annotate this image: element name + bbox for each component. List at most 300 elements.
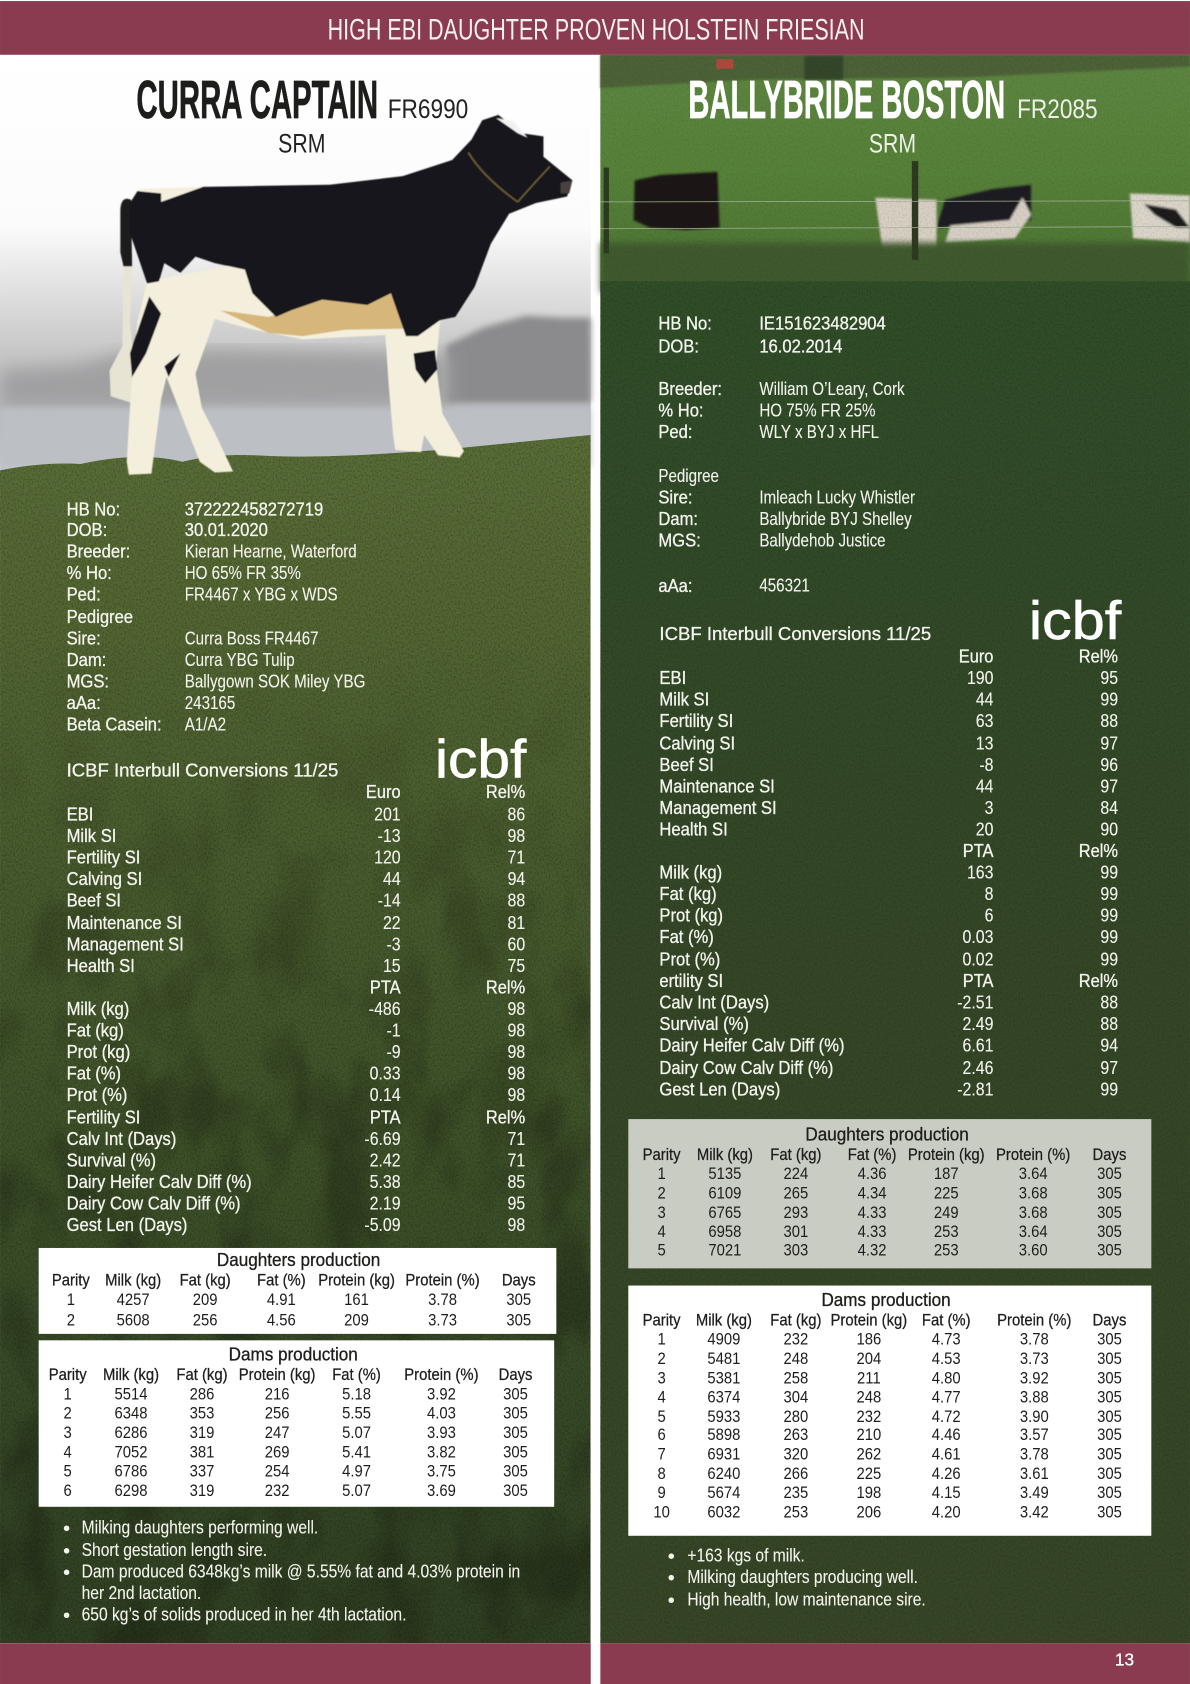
table: Ballybride Boston daughters production: 253 (934, 1223, 959, 1241)
table: Ballybride Boston genetic evaluation: Milk (kg) (659, 862, 722, 883)
panel: Curra Captain (0, 55, 591, 1643)
table: Curra Captain genetic evaluation: Calv Int (Days) (67, 1128, 176, 1149)
table: Ballybride Boston dams production: 3.78 (1020, 1446, 1049, 1464)
table: Ballybride Boston genetic evaluation: 6.61 (963, 1035, 993, 1056)
footer band right with page number (600, 1643, 1190, 1684)
table: Curra Captain dams production: 5.18 (342, 1386, 371, 1404)
table: Ballybride Boston dams production: Milk (kg) (696, 1311, 752, 1330)
table: Ballybride Boston daughters production: Daughters production (805, 1124, 969, 1145)
table: Ballybride Boston daughters production: 3.64 (1019, 1223, 1048, 1241)
table: Ballybride Boston daughters production: 4.33 (858, 1223, 887, 1241)
table: Ballybride Boston genetic evaluation: 88 (1100, 1014, 1118, 1034)
table: Ballybride Boston genetic evaluation: 99 (1100, 1079, 1118, 1100)
table: Curra Captain genetic evaluation: Gest Len (Days) (67, 1214, 187, 1235)
text block: bull details (658, 313, 915, 596)
table: Curra Captain genetic evaluation: Beef SI (67, 890, 121, 911)
table: Curra Captain genetic evaluation: 81 (508, 913, 525, 933)
table: Ballybride Boston daughters production (628, 1119, 1151, 1268)
table: Curra Captain dams production: 337 (190, 1463, 214, 1481)
table: Ballybride Boston genetic evaluation: 88 (1100, 711, 1118, 731)
table: Ballybride Boston daughters production: 265 (783, 1185, 808, 1203)
table: Ballybride Boston genetic evaluation: Beef SI (659, 754, 714, 775)
table: Ballybride Boston dams production: 3.61 (1020, 1465, 1049, 1483)
table: Curra Captain dams production: 305 (503, 1405, 528, 1423)
table: Ballybride Boston genetic evaluation: -2.81 (957, 1079, 993, 1100)
table: Curra Captain dams production: 7052 (114, 1444, 148, 1462)
table: Curra Captain daughters production: 256 (193, 1311, 218, 1330)
table: Curra Captain genetic evaluation: 95 (508, 1193, 525, 1214)
table: Ballybride Boston dams production: 4.20 (932, 1504, 961, 1522)
table: Ballybride Boston dams production: Dams production (821, 1289, 951, 1310)
table: Ballybride Boston dams production: 4909 (707, 1331, 741, 1349)
table: Curra Captain daughters production: Daughters production (217, 1249, 380, 1270)
text block: bull details: HO 65% FR 35% (185, 563, 301, 583)
text block: Ballybride Boston highlights: High health, low maintenance sire. (687, 1589, 926, 1610)
text block: bull details: FR4467 x YBG x WDS (185, 584, 338, 605)
table: Ballybride Boston dams production: 305 (1097, 1331, 1122, 1349)
table: Curra Captain genetic evaluation: -486 (369, 999, 401, 1019)
table: Ballybride Boston daughters production: 7021 (708, 1242, 742, 1260)
text block: bull details: Dam: (67, 649, 106, 670)
table: Curra Captain genetic evaluation: 2.42 (370, 1150, 401, 1171)
text block: bull details: IE151623482904 (759, 313, 886, 334)
table: Curra Captain dams production: 305 (503, 1444, 528, 1462)
photo background: dark grass (600, 281, 1190, 1643)
table: Curra Captain dams production: 305 (503, 1482, 528, 1500)
table: Ballybride Boston dams production: 4.61 (932, 1446, 961, 1464)
text block: bull details: 16.02.2014 (759, 336, 843, 356)
table: Ballybride Boston daughters production: 225 (934, 1185, 959, 1203)
table: Ballybride Boston genetic evaluation (659, 646, 1119, 1100)
table: Curra Captain dams production: 254 (265, 1463, 290, 1481)
table: Ballybride Boston dams production: 7 (657, 1446, 666, 1464)
text block: bull details: Curra Boss FR4467 (185, 628, 319, 649)
table: Ballybride Boston daughters production: 305 (1097, 1242, 1122, 1260)
table: Ballybride Boston genetic evaluation: Maintenance SI (659, 776, 775, 797)
table: Ballybride Boston genetic evaluation: Fat (kg) (659, 883, 717, 904)
table: Curra Captain genetic evaluation: 2.19 (370, 1193, 401, 1214)
table: Curra Captain daughters production: 161 (344, 1291, 369, 1309)
text block: Curra Captain highlights: Dam produced 6348kg’s milk @ 5.55% fat and 4.03% protein in (82, 1562, 520, 1582)
table: Curra Captain dams production: Parity (49, 1366, 87, 1384)
text block: bull details: DOB: (658, 336, 699, 356)
table: Curra Captain genetic evaluation: -6.69 (364, 1129, 401, 1149)
table: Curra Captain genetic evaluation: Management SI (67, 934, 184, 955)
table: Curra Captain genetic evaluation: Milk SI (67, 825, 116, 846)
table: Curra Captain dams production: 5.07 (342, 1424, 371, 1442)
table: Ballybride Boston dams production: 5 (657, 1408, 666, 1426)
table: Curra Captain genetic evaluation: Dairy Cow Calv Diff (%) (67, 1193, 241, 1213)
table: Ballybride Boston genetic evaluation: 94 (1100, 1035, 1119, 1056)
table: Ballybride Boston genetic evaluation: Dairy Heifer Calv Diff (%) (659, 1035, 845, 1056)
table: Ballybride Boston daughters production: Fat (kg) (770, 1146, 821, 1164)
table: Ballybride Boston genetic evaluation: -8 (979, 755, 993, 775)
table: Ballybride Boston dams production: 305 (1097, 1465, 1122, 1483)
table: Curra Captain genetic evaluation: Prot (%) (67, 1084, 127, 1105)
table: Ballybride Boston genetic evaluation: Euro (959, 646, 993, 667)
table: Ballybride Boston genetic evaluation: Rel% (1079, 970, 1118, 991)
table: Curra Captain genetic evaluation: 5.38 (370, 1172, 401, 1192)
table: Curra Captain dams production: 6786 (114, 1463, 148, 1481)
table: Ballybride Boston genetic evaluation: -2.51 (957, 992, 993, 1013)
photo background: grass hillside (0, 430, 591, 1643)
table: Curra Captain dams production: 6 (64, 1482, 72, 1500)
table: Curra Captain dams production: 2 (64, 1405, 72, 1423)
table: Curra Captain daughters production: 4.56 (267, 1311, 296, 1330)
table: Ballybride Boston dams production: 266 (783, 1465, 808, 1483)
table: Ballybride Boston genetic evaluation: EBI (659, 667, 686, 688)
text block: bull details: DOB: (67, 519, 107, 540)
icon: icbf logo: icbf (1029, 591, 1121, 651)
table: Ballybride Boston dams production: 186 (857, 1331, 881, 1349)
table: Ballybride Boston daughters production: Fat (%) (848, 1146, 896, 1164)
table: Curra Captain genetic evaluation: Calving SI (67, 868, 142, 889)
table: Curra Captain dams production: 3 (64, 1424, 72, 1442)
photo background: field with fence and cows (600, 55, 1190, 292)
table: Curra Captain dams production: Protein (%) (404, 1366, 479, 1384)
table: Ballybride Boston dams production: 6240 (707, 1465, 741, 1483)
code: FR2085: FR2085 (1017, 94, 1098, 124)
table: Ballybride Boston dams production: 305 (1097, 1369, 1122, 1388)
table: Ballybride Boston dams production: 204 (857, 1350, 881, 1368)
table: Ballybride Boston genetic evaluation: 99 (1100, 690, 1118, 710)
table: Ballybride Boston dams production: 235 (783, 1484, 808, 1502)
table: Curra Captain genetic evaluation: 22 (383, 913, 401, 933)
table: Ballybride Boston genetic evaluation: Gest Len (Days) (659, 1079, 780, 1100)
table: Curra Captain genetic evaluation: -1 (386, 1020, 401, 1041)
table: Curra Captain genetic evaluation: -5.09 (364, 1215, 401, 1235)
photo background: misty sky and hills (0, 55, 591, 484)
table: Ballybride Boston daughters production: 4.32 (858, 1242, 887, 1260)
table: Curra Captain daughters production: 209 (344, 1311, 369, 1330)
text block: bull details: Ped: (658, 421, 693, 442)
table: Ballybride Boston genetic evaluation: ertility SI (659, 970, 723, 991)
text block: Curra Captain highlights: Milking daughters performing well. (82, 1518, 318, 1538)
table: Ballybride Boston dams production: 3.88 (1020, 1389, 1049, 1407)
table: Curra Captain genetic evaluation: Milk (kg) (67, 998, 129, 1019)
table: Curra Captain genetic evaluation: 86 (508, 805, 525, 825)
table: Ballybride Boston daughters production: 2 (657, 1185, 666, 1203)
table: Curra Captain genetic evaluation: -3 (386, 934, 401, 955)
table: Ballybride Boston dams production: 4.73 (932, 1331, 961, 1349)
table: Ballybride Boston dams production: 253 (783, 1504, 808, 1522)
table: Ballybride Boston genetic evaluation: Prot (kg) (659, 905, 723, 926)
table: Ballybride Boston dams production: 5381 (707, 1369, 741, 1388)
table: Ballybride Boston dams production: 5481 (707, 1350, 741, 1368)
text block: bull details: Ped: (67, 584, 101, 605)
table: Ballybride Boston daughters production: 187 (934, 1165, 959, 1183)
table: Ballybride Boston dams production: 305 (1097, 1426, 1122, 1444)
table: Ballybride Boston daughters production: 253 (934, 1242, 959, 1260)
table: Ballybride Boston genetic evaluation: Rel% (1079, 840, 1118, 861)
table: Ballybride Boston genetic evaluation: 3 (985, 798, 993, 818)
table: Curra Captain genetic evaluation: Fat (%) (67, 1063, 121, 1084)
table: Curra Captain dams production: 305 (503, 1424, 528, 1442)
table: Ballybride Boston dams production: 3.78 (1020, 1331, 1049, 1349)
table: Curra Captain genetic evaluation: 98 (508, 826, 525, 846)
table: Ballybride Boston dams production: 6032 (707, 1504, 741, 1522)
text block: bull details: MGS: (67, 671, 109, 692)
table: Ballybride Boston dams production: 4.53 (932, 1350, 961, 1368)
table: Ballybride Boston dams production: 305 (1097, 1504, 1122, 1522)
table: Curra Captain genetic evaluation: -14 (378, 890, 401, 911)
table: Ballybride Boston genetic evaluation: 90 (1100, 820, 1118, 840)
table: Ballybride Boston daughters production: 4.36 (858, 1165, 887, 1183)
table: Curra Captain genetic evaluation: Rel% (486, 781, 525, 802)
table: Ballybride Boston daughters production: 1 (657, 1165, 666, 1183)
table: Curra Captain daughters production: 3.78 (428, 1291, 457, 1309)
text block: bull details: WLY x BYJ x HFL (759, 422, 879, 443)
table: Ballybride Boston dams production: 305 (1097, 1408, 1122, 1426)
table: Ballybride Boston dams production: 4.72 (932, 1408, 961, 1426)
table: Ballybride Boston dams production: 1 (657, 1331, 666, 1349)
table: Ballybride Boston dams production: 4.80 (932, 1369, 961, 1388)
table: Ballybride Boston daughters production: 301 (783, 1223, 808, 1241)
table: Ballybride Boston genetic evaluation: 0.02 (963, 950, 993, 970)
table: Ballybride Boston genetic evaluation: 96 (1100, 755, 1118, 775)
table: Ballybride Boston dams production: Fat (%) (922, 1311, 971, 1330)
table: Curra Captain dams production: 216 (265, 1386, 290, 1404)
table: Ballybride Boston dams production: 2 (657, 1350, 666, 1368)
table: Ballybride Boston genetic evaluation: 88 (1100, 992, 1118, 1013)
text block: bull details: 372222458272719 (185, 499, 323, 520)
table: Curra Captain genetic evaluation: 44 (383, 869, 401, 889)
table: Ballybride Boston dams production: Parity (643, 1311, 681, 1330)
table: Curra Captain dams production: 5514 (114, 1386, 148, 1404)
table: Curra Captain genetic evaluation: Fat (kg) (67, 1020, 124, 1041)
table: Curra Captain dams production: 256 (265, 1405, 290, 1423)
text block: Ballybride Boston highlights (668, 1545, 926, 1610)
table: Curra Captain genetic evaluation: 98 (508, 1215, 525, 1235)
title: Curra Captain: CURRA CAPTAIN (136, 70, 378, 130)
table: Ballybride Boston dams production: 6 (657, 1426, 666, 1444)
text block: bull details: Imleach Lucky Whistler (759, 487, 915, 508)
table: Curra Captain dams production: 3.69 (427, 1482, 456, 1500)
text block: Curra Captain highlights (64, 1518, 520, 1625)
table: Curra Captain dams production: Dams production (229, 1344, 358, 1365)
table: Curra Captain dams production: 381 (190, 1444, 214, 1462)
table: Curra Captain dams production: 6348 (114, 1405, 148, 1423)
text block: Ballybride Boston highlights: +163 kgs of milk. (687, 1545, 805, 1566)
table: Ballybride Boston genetic evaluation: 99 (1100, 884, 1118, 904)
table: Curra Captain dams production: 319 (190, 1424, 214, 1442)
table: Curra Captain dams production: 305 (503, 1463, 528, 1481)
table: Ballybride Boston dams production: 3.92 (1020, 1369, 1049, 1388)
label: SRM: SRM (869, 129, 916, 159)
table: Ballybride Boston dams production: 305 (1097, 1446, 1122, 1464)
label: SRM: SRM (278, 129, 325, 159)
text block: bull details: William O’Leary, Cork (759, 379, 905, 400)
table: Curra Captain daughters production: 1 (67, 1291, 75, 1309)
table: Curra Captain dams production: 4.03 (427, 1405, 456, 1423)
table: Ballybride Boston dams production: 305 (1097, 1484, 1122, 1502)
table: Ballybride Boston daughters production: 303 (783, 1242, 808, 1260)
table: Ballybride Boston dams production: 4.26 (932, 1465, 961, 1483)
table: Curra Captain genetic evaluation: 98 (508, 1042, 525, 1062)
text block: bull details: HO 75% FR 25% (759, 400, 876, 421)
table: Ballybride Boston daughters production: Milk (kg) (697, 1146, 753, 1164)
table: Ballybride Boston dams production: 9 (657, 1484, 666, 1502)
text block: bull details: 30.01.2020 (185, 519, 268, 540)
table: Ballybride Boston daughters production: 305 (1097, 1185, 1122, 1203)
table: Curra Captain genetic evaluation: 98 (508, 999, 525, 1019)
table: Curra Captain daughters production: Parity (52, 1272, 90, 1290)
table: Curra Captain genetic evaluation: Fertility SI (67, 1107, 140, 1128)
table: Ballybride Boston dams production: Protein (%) (997, 1311, 1071, 1330)
table: Ballybride Boston daughters production: 6765 (708, 1204, 742, 1222)
table: Ballybride Boston dams production (628, 1286, 1151, 1536)
table: Ballybride Boston daughters production: 5135 (708, 1165, 742, 1183)
table: Curra Captain genetic evaluation: Euro (366, 781, 401, 802)
table: Ballybride Boston genetic evaluation: 63 (976, 711, 993, 731)
text block: bull details: Kieran Hearne, Waterford (185, 541, 357, 562)
table: Curra Captain dams production: 319 (190, 1482, 214, 1500)
table: Ballybride Boston dams production: 3.49 (1020, 1484, 1049, 1502)
table: Curra Captain genetic evaluation: 0.14 (370, 1085, 401, 1105)
table: Ballybride Boston dams production: 305 (1097, 1350, 1122, 1368)
table: Ballybride Boston dams production: 8 (657, 1465, 666, 1483)
table: Ballybride Boston genetic evaluation: 163 (967, 863, 993, 883)
table: Ballybride Boston genetic evaluation: 97 (1100, 1058, 1118, 1078)
text block: bull details: 456321 (759, 575, 810, 596)
table: Ballybride Boston daughters production: 293 (783, 1204, 808, 1222)
table: Curra Captain dams production: 6286 (114, 1424, 148, 1442)
table: Curra Captain dams production: 305 (503, 1386, 528, 1404)
text block: bull details: Sire: (67, 628, 101, 649)
table: Ballybride Boston genetic evaluation: Calving SI (659, 733, 735, 754)
text block: Ballybride Boston highlights: Milking daughters producing well. (687, 1567, 918, 1587)
table: Ballybride Boston dams production: Fat (kg) (770, 1311, 821, 1330)
table: Curra Captain daughters production: Milk (kg) (105, 1272, 161, 1290)
table: Ballybride Boston genetic evaluation: 84 (1100, 798, 1119, 818)
table: Ballybride Boston dams production: 4.46 (932, 1426, 961, 1444)
table: Curra Captain genetic evaluation: PTA (370, 1107, 401, 1128)
table: Curra Captain genetic evaluation: 120 (374, 847, 401, 868)
table: Curra Captain daughters production: 305 (506, 1291, 531, 1309)
text block: bull details: A1/A2 (185, 714, 226, 735)
text block: bull details: Ballydehob Justice (759, 530, 886, 551)
table: Curra Captain dams production: 4 (64, 1444, 72, 1462)
table: Curra Captain genetic evaluation: 15 (383, 956, 401, 976)
text block: bull details (67, 499, 365, 735)
table: Ballybride Boston dams production: 5674 (707, 1484, 741, 1502)
text block: bull details: Breeder: (67, 541, 130, 562)
table: Ballybride Boston genetic evaluation: 44 (976, 777, 994, 797)
text block: bull details: Pedigree (658, 466, 719, 487)
table: Curra Captain dams production: 353 (190, 1405, 214, 1423)
table: Curra Captain genetic evaluation: 75 (508, 956, 525, 976)
text block: bull details: HB No: (658, 313, 712, 334)
table: Curra Captain dams production: Milk (kg) (103, 1366, 159, 1384)
table: Ballybride Boston dams production: 3 (657, 1369, 666, 1388)
table: Ballybride Boston genetic evaluation: 2.49 (963, 1014, 993, 1034)
table: Curra Captain daughters production: 305 (506, 1311, 531, 1330)
table: Ballybride Boston dams production: 263 (783, 1426, 808, 1444)
table: Curra Captain daughters production: Protein (%) (405, 1272, 480, 1290)
table: Ballybride Boston dams production: 210 (857, 1426, 881, 1444)
table: Ballybride Boston genetic evaluation: Fertility SI (659, 710, 733, 731)
table: Ballybride Boston dams production: 4.15 (932, 1484, 961, 1502)
table: Curra Captain daughters production: 2 (67, 1311, 75, 1330)
text block: bull details: MGS: (658, 530, 701, 551)
table: Ballybride Boston genetic evaluation: 44 (976, 690, 994, 710)
table: Ballybride Boston dams production: 3.42 (1020, 1504, 1049, 1522)
panel: Ballybride Boston (600, 55, 1190, 1643)
table: Curra Captain dams production: 3.75 (427, 1463, 456, 1481)
table: Ballybride Boston dams production: 225 (857, 1465, 881, 1483)
text block: bull details: Beta Casein: (67, 714, 162, 734)
table: Curra Captain dams production (39, 1340, 554, 1507)
table: Ballybride Boston daughters production: Protein (kg) (908, 1146, 985, 1164)
table: Curra Captain genetic evaluation: Rel% (486, 977, 525, 998)
table: Curra Captain dams production: 3.93 (427, 1424, 456, 1442)
table: Curra Captain genetic evaluation: -13 (378, 826, 401, 846)
text block: bull details: Breeder: (658, 378, 722, 399)
footer band left (0, 1643, 591, 1684)
table: Ballybride Boston daughters production: 3.68 (1019, 1204, 1048, 1222)
header band: HIGH EBI DAUGHTER PROVEN HOLSTEIN FRIESIAN (328, 14, 865, 47)
table: Curra Captain genetic evaluation: Maintenance SI (67, 912, 182, 933)
table: Ballybride Boston genetic evaluation: Management SI (659, 797, 777, 818)
table: Ballybride Boston daughters production: 4.33 (858, 1204, 887, 1222)
heading: ICBF conversions: ICBF Interbull Conversions 11/25 (659, 623, 931, 644)
table: Ballybride Boston genetic evaluation: 6 (985, 905, 993, 926)
table: Ballybride Boston daughters production: 3 (657, 1204, 666, 1222)
table: Curra Captain dams production: 1 (64, 1386, 72, 1404)
text block: bull details: Dam: (658, 508, 698, 529)
table: Ballybride Boston genetic evaluation: 99 (1100, 905, 1118, 926)
table: Ballybride Boston genetic evaluation: Calv Int (Days) (659, 992, 769, 1013)
table: Curra Captain genetic evaluation: Fertility SI (67, 847, 140, 868)
table: Ballybride Boston dams production: 5933 (707, 1408, 741, 1426)
table: Ballybride Boston daughters production: 6958 (708, 1223, 742, 1241)
table: Curra Captain genetic evaluation: EBI (67, 804, 93, 825)
table: Ballybride Boston dams production: Days (1093, 1311, 1126, 1330)
table: Ballybride Boston daughters production: 5 (657, 1242, 666, 1260)
table: Ballybride Boston dams production: 206 (857, 1504, 881, 1522)
text block: Curra Captain highlights: 650 kg’s of solids produced in her 4th lactation. (82, 1605, 406, 1625)
icon: icbf logo: icbf (435, 730, 526, 790)
table: Ballybride Boston genetic evaluation: Prot (%) (659, 949, 720, 970)
table: Ballybride Boston dams production: 232 (783, 1331, 808, 1349)
text block: bull details: 243165 (185, 693, 235, 713)
table: Ballybride Boston daughters production: 4.34 (858, 1185, 887, 1203)
table: Ballybride Boston dams production: 10 (653, 1504, 670, 1522)
heading: ICBF conversions: ICBF Interbull Conversions 11/25 (67, 759, 338, 780)
table: Ballybride Boston genetic evaluation: 97 (1100, 777, 1118, 797)
table: Curra Captain genetic evaluation: 85 (508, 1172, 525, 1192)
table: Curra Captain dams production: 5.07 (342, 1482, 371, 1500)
table: Curra Captain daughters production: 4257 (117, 1291, 150, 1309)
table: Ballybride Boston daughters production: Parity (643, 1146, 681, 1164)
table: Ballybride Boston daughters production: 305 (1097, 1165, 1122, 1183)
table: Curra Captain genetic evaluation: 98 (508, 1085, 525, 1105)
table: Curra Captain dams production: 3.92 (427, 1386, 456, 1404)
table: Ballybride Boston genetic evaluation: 0.03 (963, 927, 993, 947)
table: Curra Captain dams production: Fat (kg) (176, 1366, 228, 1384)
table: Ballybride Boston genetic evaluation: Fat (%) (659, 926, 714, 947)
table: Ballybride Boston genetic evaluation: Health SI (659, 819, 728, 840)
table: Ballybride Boston genetic evaluation: 8 (985, 884, 993, 904)
table: Curra Captain daughters production: Days (502, 1272, 536, 1290)
table: Curra Captain dams production: 5 (64, 1463, 72, 1481)
table: Curra Captain genetic evaluation: 94 (508, 869, 526, 889)
table: Curra Captain dams production: 6298 (114, 1482, 148, 1500)
table: Ballybride Boston genetic evaluation: 99 (1100, 950, 1118, 970)
table: Curra Captain genetic evaluation: PTA (370, 977, 401, 998)
text block: bull details: Ballygown SOK Miley YBG (185, 671, 365, 692)
table: Curra Captain genetic evaluation: 0.33 (370, 1063, 401, 1084)
